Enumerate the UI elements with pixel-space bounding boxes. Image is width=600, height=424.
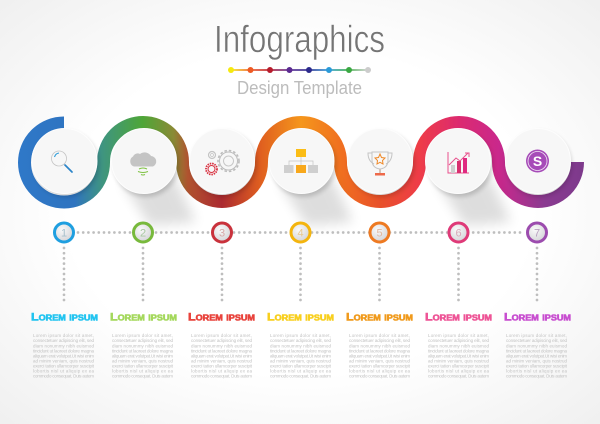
badge 4 xyxy=(291,223,310,242)
badge 4: 4 xyxy=(297,228,304,240)
text block 5: lobortis nisl ut aliquip ex ea xyxy=(349,368,410,374)
text block 5: diam nonummy nibh euismod xyxy=(349,343,410,348)
icon: trophy xyxy=(368,152,392,176)
text block 4: Lorem ipsum dolor sit amet, xyxy=(270,333,331,338)
icon: dollar coin: S xyxy=(533,153,542,169)
badge 6: 6 xyxy=(455,228,462,240)
title dot line xyxy=(228,67,371,73)
text block 6: commodo consequat. Duis autem xyxy=(428,374,489,379)
heading 4: Lorem ipsum xyxy=(267,312,334,324)
text block 4: aliquam erat volutpat.Ut wisi enim xyxy=(270,353,331,358)
text block 6 xyxy=(428,333,490,379)
text block 5: commodo consequat. Duis autem xyxy=(349,374,410,379)
text block 5: ad minim veniam, quis nostrud xyxy=(349,358,410,363)
text block 7 xyxy=(506,333,568,379)
text block 3: exerci tation ullamcorper suscipit xyxy=(191,364,253,368)
badge 3 xyxy=(212,223,232,242)
text block 5: aliquam erat volutpat.Ut wisi enim xyxy=(349,353,410,358)
ribbon xyxy=(25,122,577,202)
text block 3: diam nonummy nibh euismod xyxy=(191,343,252,348)
icon: magnifier xyxy=(52,151,72,172)
text block 2: consectetuer adipiscing elit, sed xyxy=(112,338,173,343)
text block 7: Lorem ipsum dolor sit amet, xyxy=(506,333,567,338)
text block 7: diam nonummy nibh euismod xyxy=(506,343,567,348)
text block 7: commodo consequat. Duis autem xyxy=(506,374,567,379)
badge 1 xyxy=(54,223,74,242)
text block 1: consectetuer adipiscing elit, sed xyxy=(33,338,94,343)
icon: dollar coin xyxy=(526,150,549,172)
text block 1: aliquam erat volutpat.Ut wisi enim xyxy=(33,353,94,358)
text block 5: tincidunt ut laoreet dolore magna xyxy=(349,348,410,353)
text block 1: ad minim veniam, quis nostrud xyxy=(33,358,94,363)
text block 4: ad minim veniam, quis nostrud xyxy=(270,358,331,363)
heading 7: Lorem ipsum xyxy=(504,312,571,324)
text block 5: exerci tation ullamcorper suscipit xyxy=(349,364,411,368)
long shadows xyxy=(122,172,511,226)
heading 5: Lorem ipsum xyxy=(346,312,413,324)
text block 6: lobortis nisl ut aliquip ex ea xyxy=(428,368,489,374)
heading 3: Lorem ipsum xyxy=(188,312,255,324)
heading 1: Lorem ipsum xyxy=(31,312,98,324)
text block 2: commodo consequat. Duis autem xyxy=(112,374,173,379)
text block 7: tincidunt ut laoreet dolore magna xyxy=(506,348,567,353)
icon: flowchart xyxy=(284,149,318,173)
text block 2: Lorem ipsum dolor sit amet, xyxy=(112,333,173,338)
vertical dotted connectors xyxy=(64,248,537,301)
text block 2 xyxy=(112,333,174,379)
text block 6: diam nonummy nibh euismod xyxy=(428,343,489,348)
badge 3: 3 xyxy=(219,228,225,240)
text block 1: lobortis nisl ut aliquip ex ea xyxy=(33,368,94,374)
badge 2 xyxy=(134,223,152,242)
text block 7: consectetuer adipiscing elit, sed xyxy=(506,338,567,343)
heading 6: Lorem ipsum xyxy=(425,312,492,324)
text block 5: consectetuer adipiscing elit, sed xyxy=(349,338,410,343)
badge 7: 7 xyxy=(534,228,540,240)
horizontal dotted connector xyxy=(78,231,525,234)
text block 4 xyxy=(270,333,332,379)
text block 7: ad minim veniam, quis nostrud xyxy=(506,358,567,363)
circle shadows xyxy=(33,131,572,197)
text block 3: aliquam erat volutpat.Ut wisi enim xyxy=(191,353,252,358)
text block 1: tincidunt ut laoreet dolore magna xyxy=(33,348,94,353)
badge 1: 1 xyxy=(61,228,67,240)
text block 4: consectetuer adipiscing elit, sed xyxy=(270,338,331,343)
text block 6: ad minim veniam, quis nostrud xyxy=(428,358,489,363)
text block 7: lobortis nisl ut aliquip ex ea xyxy=(506,368,567,374)
text block 7: exerci tation ullamcorper suscipit xyxy=(506,364,568,368)
badge 7 xyxy=(528,223,546,242)
text block 1: diam nonummy nibh euismod xyxy=(33,343,94,348)
text block 1 xyxy=(33,333,95,379)
text block 2: lobortis nisl ut aliquip ex ea xyxy=(112,368,173,374)
icon: gears xyxy=(206,150,239,174)
text block 6: Lorem ipsum dolor sit amet, xyxy=(428,333,489,338)
text block 7: aliquam erat volutpat.Ut wisi enim xyxy=(506,353,567,358)
text block 3: ad minim veniam, quis nostrud xyxy=(191,358,252,363)
text block 6: tincidunt ut laoreet dolore magna xyxy=(428,348,489,353)
heading 2: Lorem ipsum xyxy=(110,312,177,324)
text block 5 xyxy=(349,333,411,379)
text block 2: diam nonummy nibh euismod xyxy=(112,343,173,348)
text block 6: aliquam erat volutpat.Ut wisi enim xyxy=(428,353,489,358)
badge 5: 5 xyxy=(376,228,383,240)
text block 2: tincidunt ut laoreet dolore magna xyxy=(112,348,173,353)
badge 6 xyxy=(449,223,468,242)
text block 2: ad minim veniam, quis nostrud xyxy=(112,358,173,363)
badge 5 xyxy=(370,223,389,242)
text block 3: lobortis nisl ut aliquip ex ea xyxy=(191,368,252,374)
title: Infographics xyxy=(214,18,385,60)
text block 4: tincidunt ut laoreet dolore magna xyxy=(270,348,331,353)
text block 1: commodo consequat. Duis autem xyxy=(33,374,94,379)
text block 2: aliquam erat volutpat.Ut wisi enim xyxy=(112,353,173,358)
text block 1: Lorem ipsum dolor sit amet, xyxy=(33,333,94,338)
text block 4: exerci tation ullamcorper suscipit xyxy=(270,364,332,368)
text block 3: consectetuer adipiscing elit, sed xyxy=(191,338,252,343)
text block 6: exerci tation ullamcorper suscipit xyxy=(428,364,490,368)
panel: step circles xyxy=(32,128,570,194)
text block 1: exerci tation ullamcorper suscipit xyxy=(33,364,95,368)
text block 3: commodo consequat. Duis autem xyxy=(191,374,252,379)
text block 3: tincidunt ut laoreet dolore magna xyxy=(191,348,252,353)
text block 3 xyxy=(191,333,253,379)
text block 3: Lorem ipsum dolor sit amet, xyxy=(191,333,252,338)
text block 5: Lorem ipsum dolor sit amet, xyxy=(349,333,410,338)
subtitle: Design Template xyxy=(237,77,362,98)
text block 4: lobortis nisl ut aliquip ex ea xyxy=(270,368,331,374)
icon: cloud xyxy=(130,152,156,175)
badge 2: 2 xyxy=(140,228,146,240)
text block 4: diam nonummy nibh euismod xyxy=(270,343,331,348)
icon: bar chart xyxy=(448,152,469,173)
text block 2: exerci tation ullamcorper suscipit xyxy=(112,364,174,368)
text block 4: commodo consequat. Duis autem xyxy=(270,374,331,379)
text block 6: consectetuer adipiscing elit, sed xyxy=(428,338,489,343)
